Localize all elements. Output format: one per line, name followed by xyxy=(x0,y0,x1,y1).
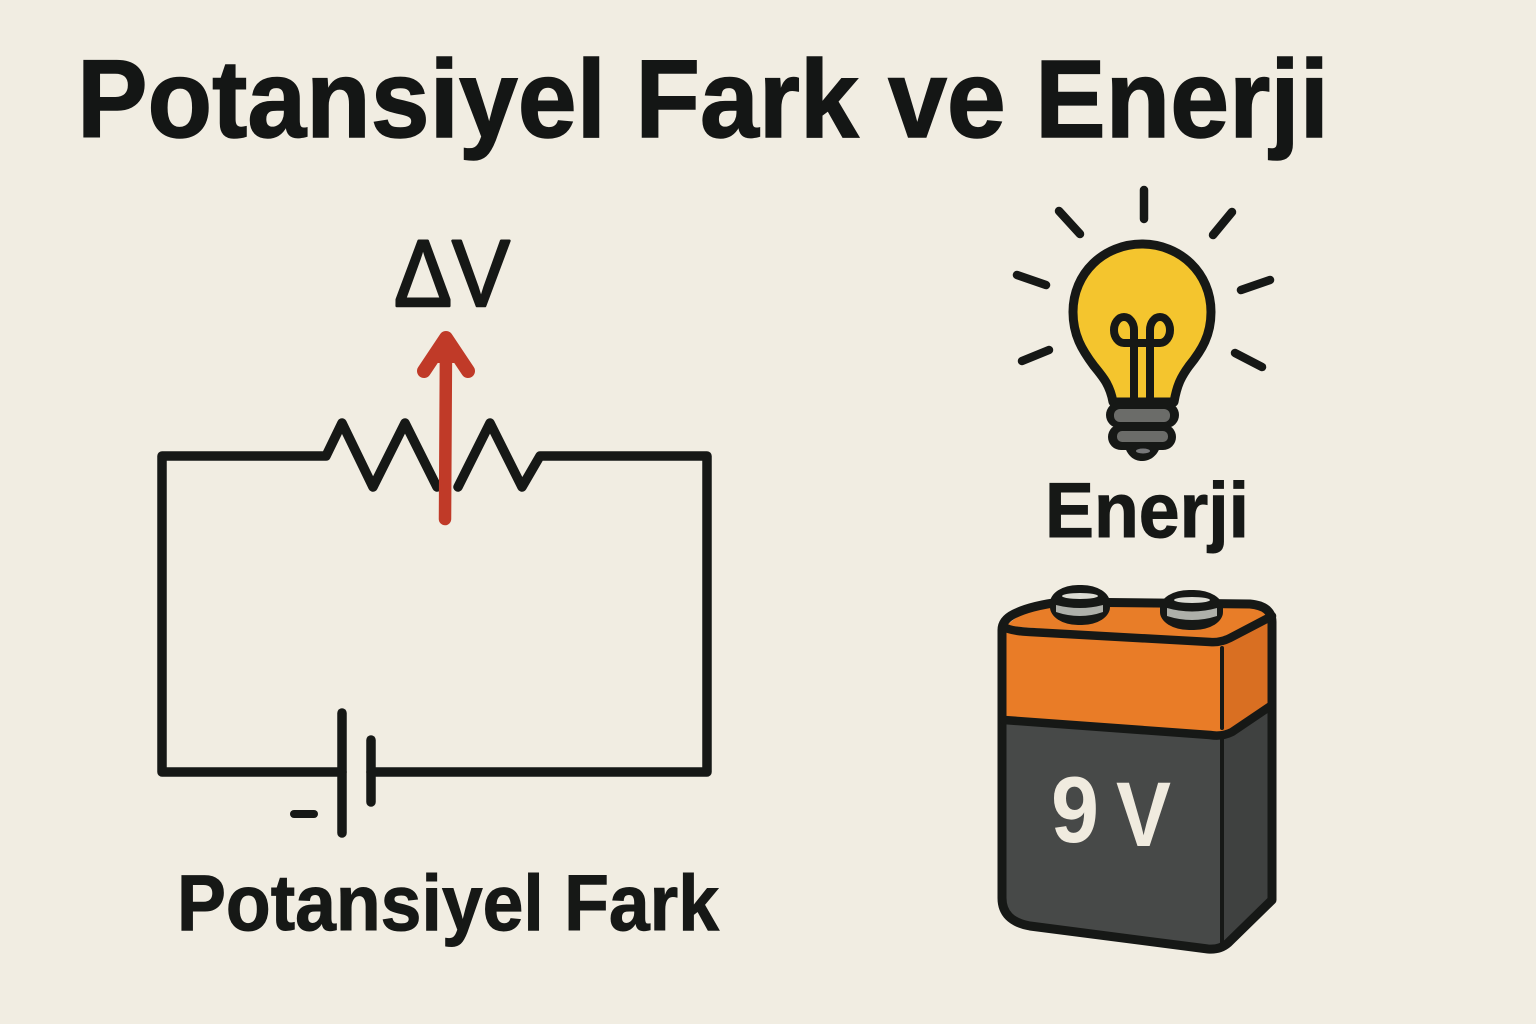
bulb base xyxy=(1106,402,1179,461)
label: Enerji: Enerji xyxy=(1045,466,1249,554)
battery orange band xyxy=(1004,628,1223,736)
battery top face xyxy=(1006,602,1272,642)
label: Potansiyel Fark: Potansiyel Fark xyxy=(177,858,720,947)
icon: light bulb xyxy=(1017,190,1270,461)
title: Potansiyel Fark ve Enerji xyxy=(77,38,1329,161)
panel: circuit diagram xyxy=(162,221,720,947)
bulb glass xyxy=(1073,244,1211,402)
battery label: 9 V: 9 xyxy=(1051,757,1099,862)
battery symbol xyxy=(294,713,371,833)
battery label: 9 V xyxy=(1051,757,1171,866)
bulb rays xyxy=(1017,190,1270,367)
battery label: 9 V: V xyxy=(1116,764,1171,866)
bulb filament xyxy=(1114,317,1170,402)
arrow: potential difference xyxy=(424,338,468,519)
label: delta V: ΔV xyxy=(394,221,510,327)
battery terminal right xyxy=(1160,590,1223,630)
battery dark body xyxy=(1003,720,1223,950)
icon: 9V battery xyxy=(1002,585,1272,950)
battery terminal left xyxy=(1050,585,1110,625)
circuit wire with resistor xyxy=(162,423,707,772)
battery outlines xyxy=(1002,602,1272,949)
